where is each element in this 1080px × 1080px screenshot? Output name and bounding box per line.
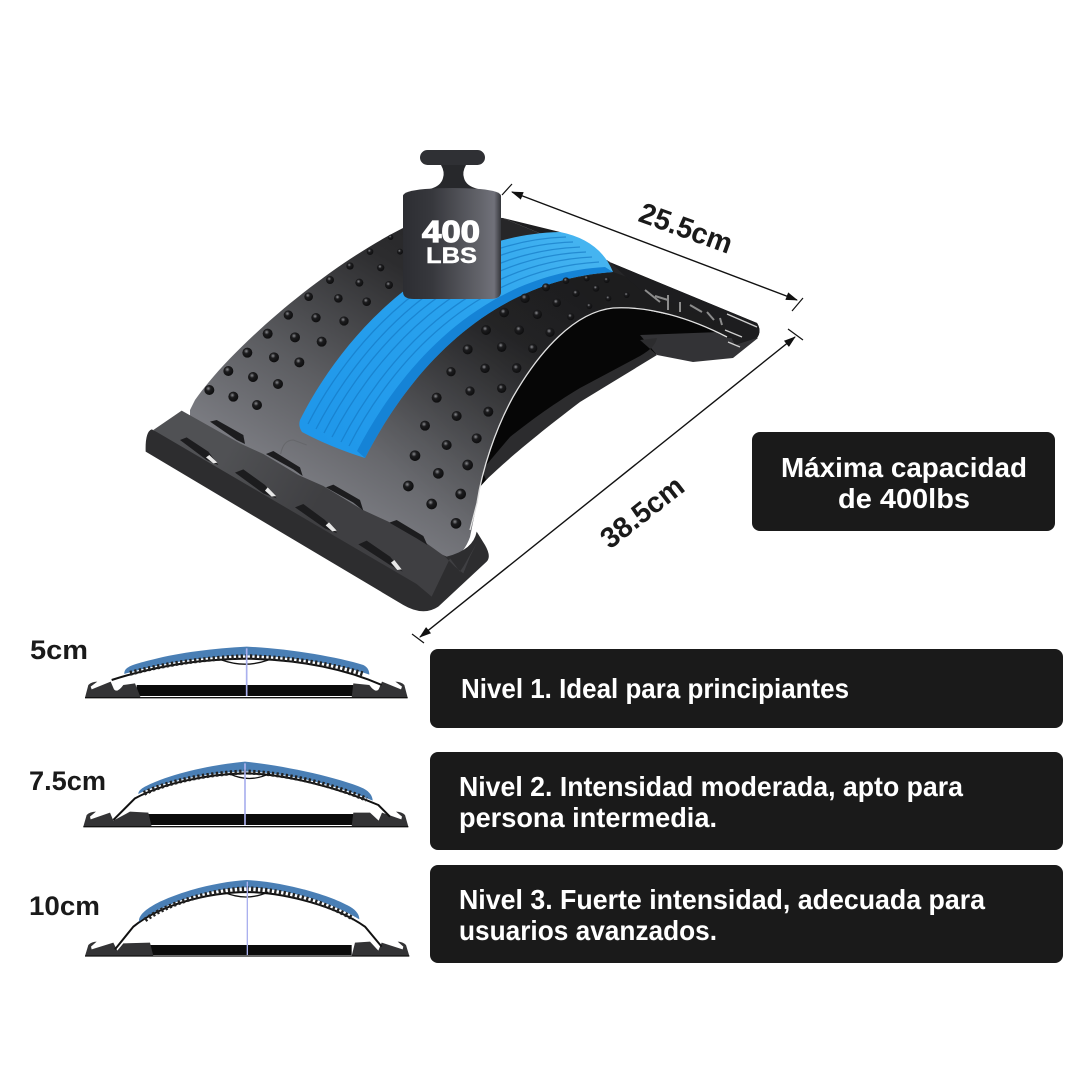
panel: level 3: usuarios avanzados. — [459, 915, 717, 946]
icon: 400 lbs weight — [403, 150, 501, 299]
panel: level 1: Nivel 1. Ideal para principiantes — [461, 673, 849, 704]
front base and flap — [146, 411, 489, 611]
panel: level 1 — [430, 649, 1063, 728]
label: 25.5cm: 25.5cm — [635, 197, 737, 261]
far end rim and teeth — [503, 218, 760, 347]
panel: level 3: Nivel 3. Fuerte intensidad, adecuada para — [459, 884, 985, 915]
right side of plate — [365, 272, 760, 566]
panel: level 2: Nivel 2. Intensidad moderada, apto para — [459, 771, 963, 802]
side view: level 3 — [85, 880, 409, 956]
side view: level 1 — [85, 647, 408, 698]
massage dots: right — [403, 294, 530, 529]
callout: maximum capacity: de 400lbs — [838, 483, 970, 514]
dimension: length 38.5cm — [412, 329, 803, 643]
height label: 5cm: 5cm — [30, 635, 88, 665]
side view: level 2 — [83, 762, 408, 827]
panel: level 2 — [430, 752, 1063, 850]
blue cushion — [299, 232, 613, 458]
panel: level 3 — [430, 865, 1063, 963]
product: lumbar stretcher — [146, 215, 760, 611]
weight label: LBS: LBS — [426, 243, 477, 268]
label: 38.5cm: 38.5cm — [595, 470, 691, 555]
callout: maximum capacity: Máxima capacidad — [781, 452, 1027, 483]
height label: 7.5cm: 7.5cm — [29, 766, 106, 796]
weight label: 400: 400 — [422, 214, 480, 249]
massage dots: far right — [480, 275, 630, 416]
far edge and under arch — [468, 298, 758, 500]
arched plate — [190, 215, 760, 566]
dimension: width 25.5cm — [502, 184, 803, 311]
massage dots: left — [204, 235, 403, 410]
panel: level 2: persona intermedia. — [459, 802, 717, 833]
height label: 10cm: 10cm — [29, 891, 100, 921]
white arch edge — [470, 308, 727, 530]
callout: maximum capacity — [752, 432, 1055, 531]
